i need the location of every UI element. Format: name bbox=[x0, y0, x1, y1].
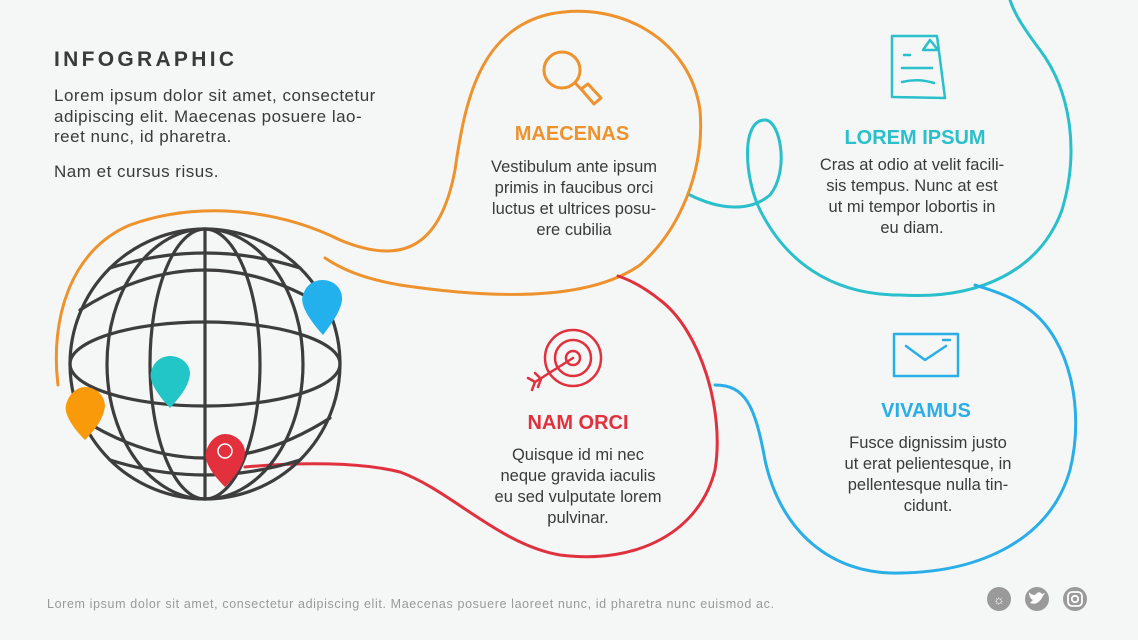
text: vivamus: cidunt. bbox=[904, 497, 952, 515]
text: nam orci: Quisque id mi nec bbox=[512, 446, 644, 464]
icon: envelope bbox=[894, 334, 958, 376]
icon: magnifier bbox=[544, 52, 601, 104]
text: lorem ipsum: Cras at odio at velit facili- bbox=[820, 156, 1004, 174]
blue line: vivamus blob bbox=[715, 285, 1076, 573]
text: lorem ipsum: eu diam. bbox=[880, 219, 944, 237]
text: nam orci: neque gravida iaculis bbox=[500, 467, 656, 485]
text: vivamus: Fusce dignissim justo bbox=[849, 434, 1007, 452]
intro text: Nam et cursus risus. bbox=[54, 162, 219, 180]
red line: nam orci blob bbox=[245, 276, 717, 557]
icon: target bbox=[528, 330, 601, 390]
text: vivamus bbox=[845, 434, 1011, 515]
intro text: reet nunc, id pharetra. bbox=[54, 127, 232, 146]
intro text: Lorem ipsum dolor sit amet, consectetur bbox=[54, 86, 376, 105]
text: maecenas bbox=[491, 158, 657, 239]
text: maecenas: Vestibulum ante ipsum bbox=[491, 158, 657, 176]
orange line: maecenas blob bbox=[56, 11, 701, 385]
intro text: adipiscing elit. Maecenas posuere lao- bbox=[54, 106, 362, 126]
text: maecenas: ere cubilia bbox=[536, 221, 612, 239]
text: nam orci bbox=[495, 446, 661, 527]
icons: social: ☼ bbox=[993, 592, 1005, 607]
heading: nam orci: NAM ORCI bbox=[527, 412, 629, 434]
text: maecenas: primis in faucibus orci bbox=[495, 179, 653, 197]
icon: pins bbox=[66, 280, 342, 487]
text: nam orci: pulvinar. bbox=[547, 509, 609, 527]
footer text: Lorem ipsum dolor sit amet, consectetur adipiscing elit. Maecenas posuere laoreet nunc, id pharetra nunc euismod ac. bbox=[47, 597, 775, 611]
intro text bbox=[54, 86, 376, 180]
title: INFOGRAPHIC bbox=[54, 48, 237, 71]
icon: globe bbox=[70, 229, 340, 499]
text: lorem ipsum bbox=[820, 156, 1004, 237]
text: vivamus: ut erat pelientesque, in bbox=[845, 455, 1011, 473]
teal line: lorem ipsum blob bbox=[690, 0, 1071, 296]
text: vivamus: pellentesque nulla tin- bbox=[848, 476, 1008, 494]
text: maecenas: luctus et ultrices posu- bbox=[492, 200, 656, 218]
heading: maecenas: MAECENAS bbox=[515, 123, 629, 145]
text: lorem ipsum: sis tempus. Nunc at est bbox=[826, 177, 998, 195]
text: nam orci: eu sed vulputate lorem bbox=[495, 488, 661, 506]
heading: lorem ipsum: LOREM IPSUM bbox=[844, 127, 986, 149]
text: lorem ipsum: ut mi tempor lobortis in bbox=[829, 198, 995, 216]
icons: social bbox=[987, 587, 1087, 611]
icon: document bbox=[892, 36, 945, 98]
heading: vivamus: VIVAMUS bbox=[881, 400, 971, 422]
